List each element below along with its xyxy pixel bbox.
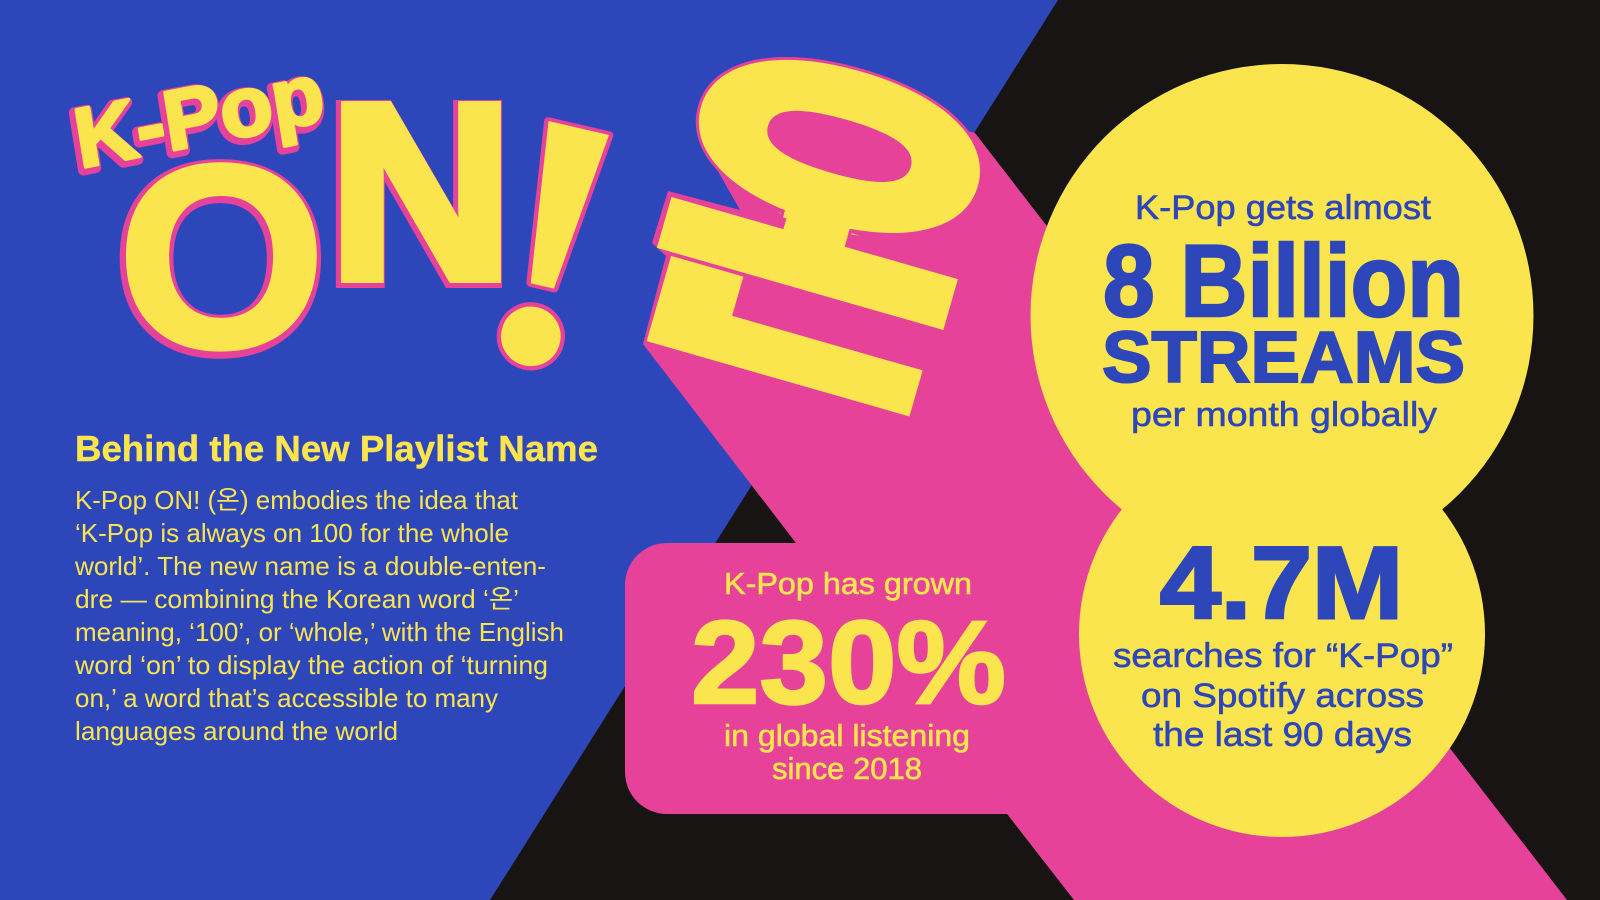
title word: K-Pop: K-Pop — [68, 45, 330, 186]
text block: playlist name description: world’. The new name is a double-enten- — [74, 551, 546, 581]
title letter: O: O — [116, 113, 325, 405]
title letter: N: N — [327, 54, 511, 333]
stat: 8 billion streams: K-Pop gets almost — [1135, 189, 1432, 227]
text block: playlist name description: dre — combining the Korean word ‘온’ — [75, 584, 519, 614]
title letter: O: O — [117, 111, 326, 403]
stat: 4.7M searches — [1113, 526, 1453, 754]
text block: playlist name description: meaning, ‘100’, or ‘whole,’ with the English — [75, 617, 564, 647]
stat: 230% growth: K-Pop has grown — [724, 566, 972, 601]
stat: 8 billion streams: per month globally — [1131, 396, 1437, 434]
stat: 4.7M searches: the last 90 days — [1153, 716, 1412, 754]
stat: 8 billion streams: STREAMS — [1102, 318, 1465, 398]
korean glyph: 온 — [646, 57, 980, 416]
stat: 4.7M searches: 4.7M — [1160, 526, 1403, 640]
stat: 8 billion streams: 8 Billion — [1103, 224, 1464, 338]
stat: 230% growth: since 2018 — [772, 751, 922, 786]
title: K-Pop ON! — [68, 76, 614, 370]
text block: playlist name description: ‘K-Pop is always on 100 for the whole — [75, 518, 509, 548]
stat: 230% growth: 230% — [691, 597, 1006, 729]
text block: playlist name description: languages around the world — [75, 716, 398, 746]
panel: pink rounded stat box — [625, 543, 1125, 814]
title word: K-Pop: K-Pop — [66, 48, 328, 189]
pink diagonal shadow band — [643, 85, 1567, 900]
text block: playlist name description: word ‘on’ to display the action of ‘turning — [74, 650, 548, 680]
text block: playlist name description: on,’ a word that’s accessible to many — [75, 683, 498, 713]
stat: 230% growth: in global listening — [724, 718, 970, 753]
stat: 4.7M searches: on Spotify across — [1141, 677, 1424, 715]
text block: playlist name description — [74, 485, 564, 746]
yellow circles — [1030, 64, 1534, 837]
stat: 230% growth — [691, 566, 1006, 786]
stat: 4.7M searches: searches for “K-Pop” — [1113, 637, 1453, 675]
title letter: N: N — [329, 52, 513, 331]
panel: blue diagonal background — [0, 0, 1058, 900]
text block: playlist name description: K-Pop ON! (온) embodies the idea that — [75, 485, 519, 515]
title exclamation mark: ! — [439, 30, 667, 451]
stat: 8 billion streams — [1102, 189, 1465, 434]
title exclamation mark: ! — [448, 29, 658, 452]
heading: Behind the New Playlist Name: Behind the New Playlist Name — [75, 428, 598, 469]
title exclamation mark — [496, 117, 614, 370]
